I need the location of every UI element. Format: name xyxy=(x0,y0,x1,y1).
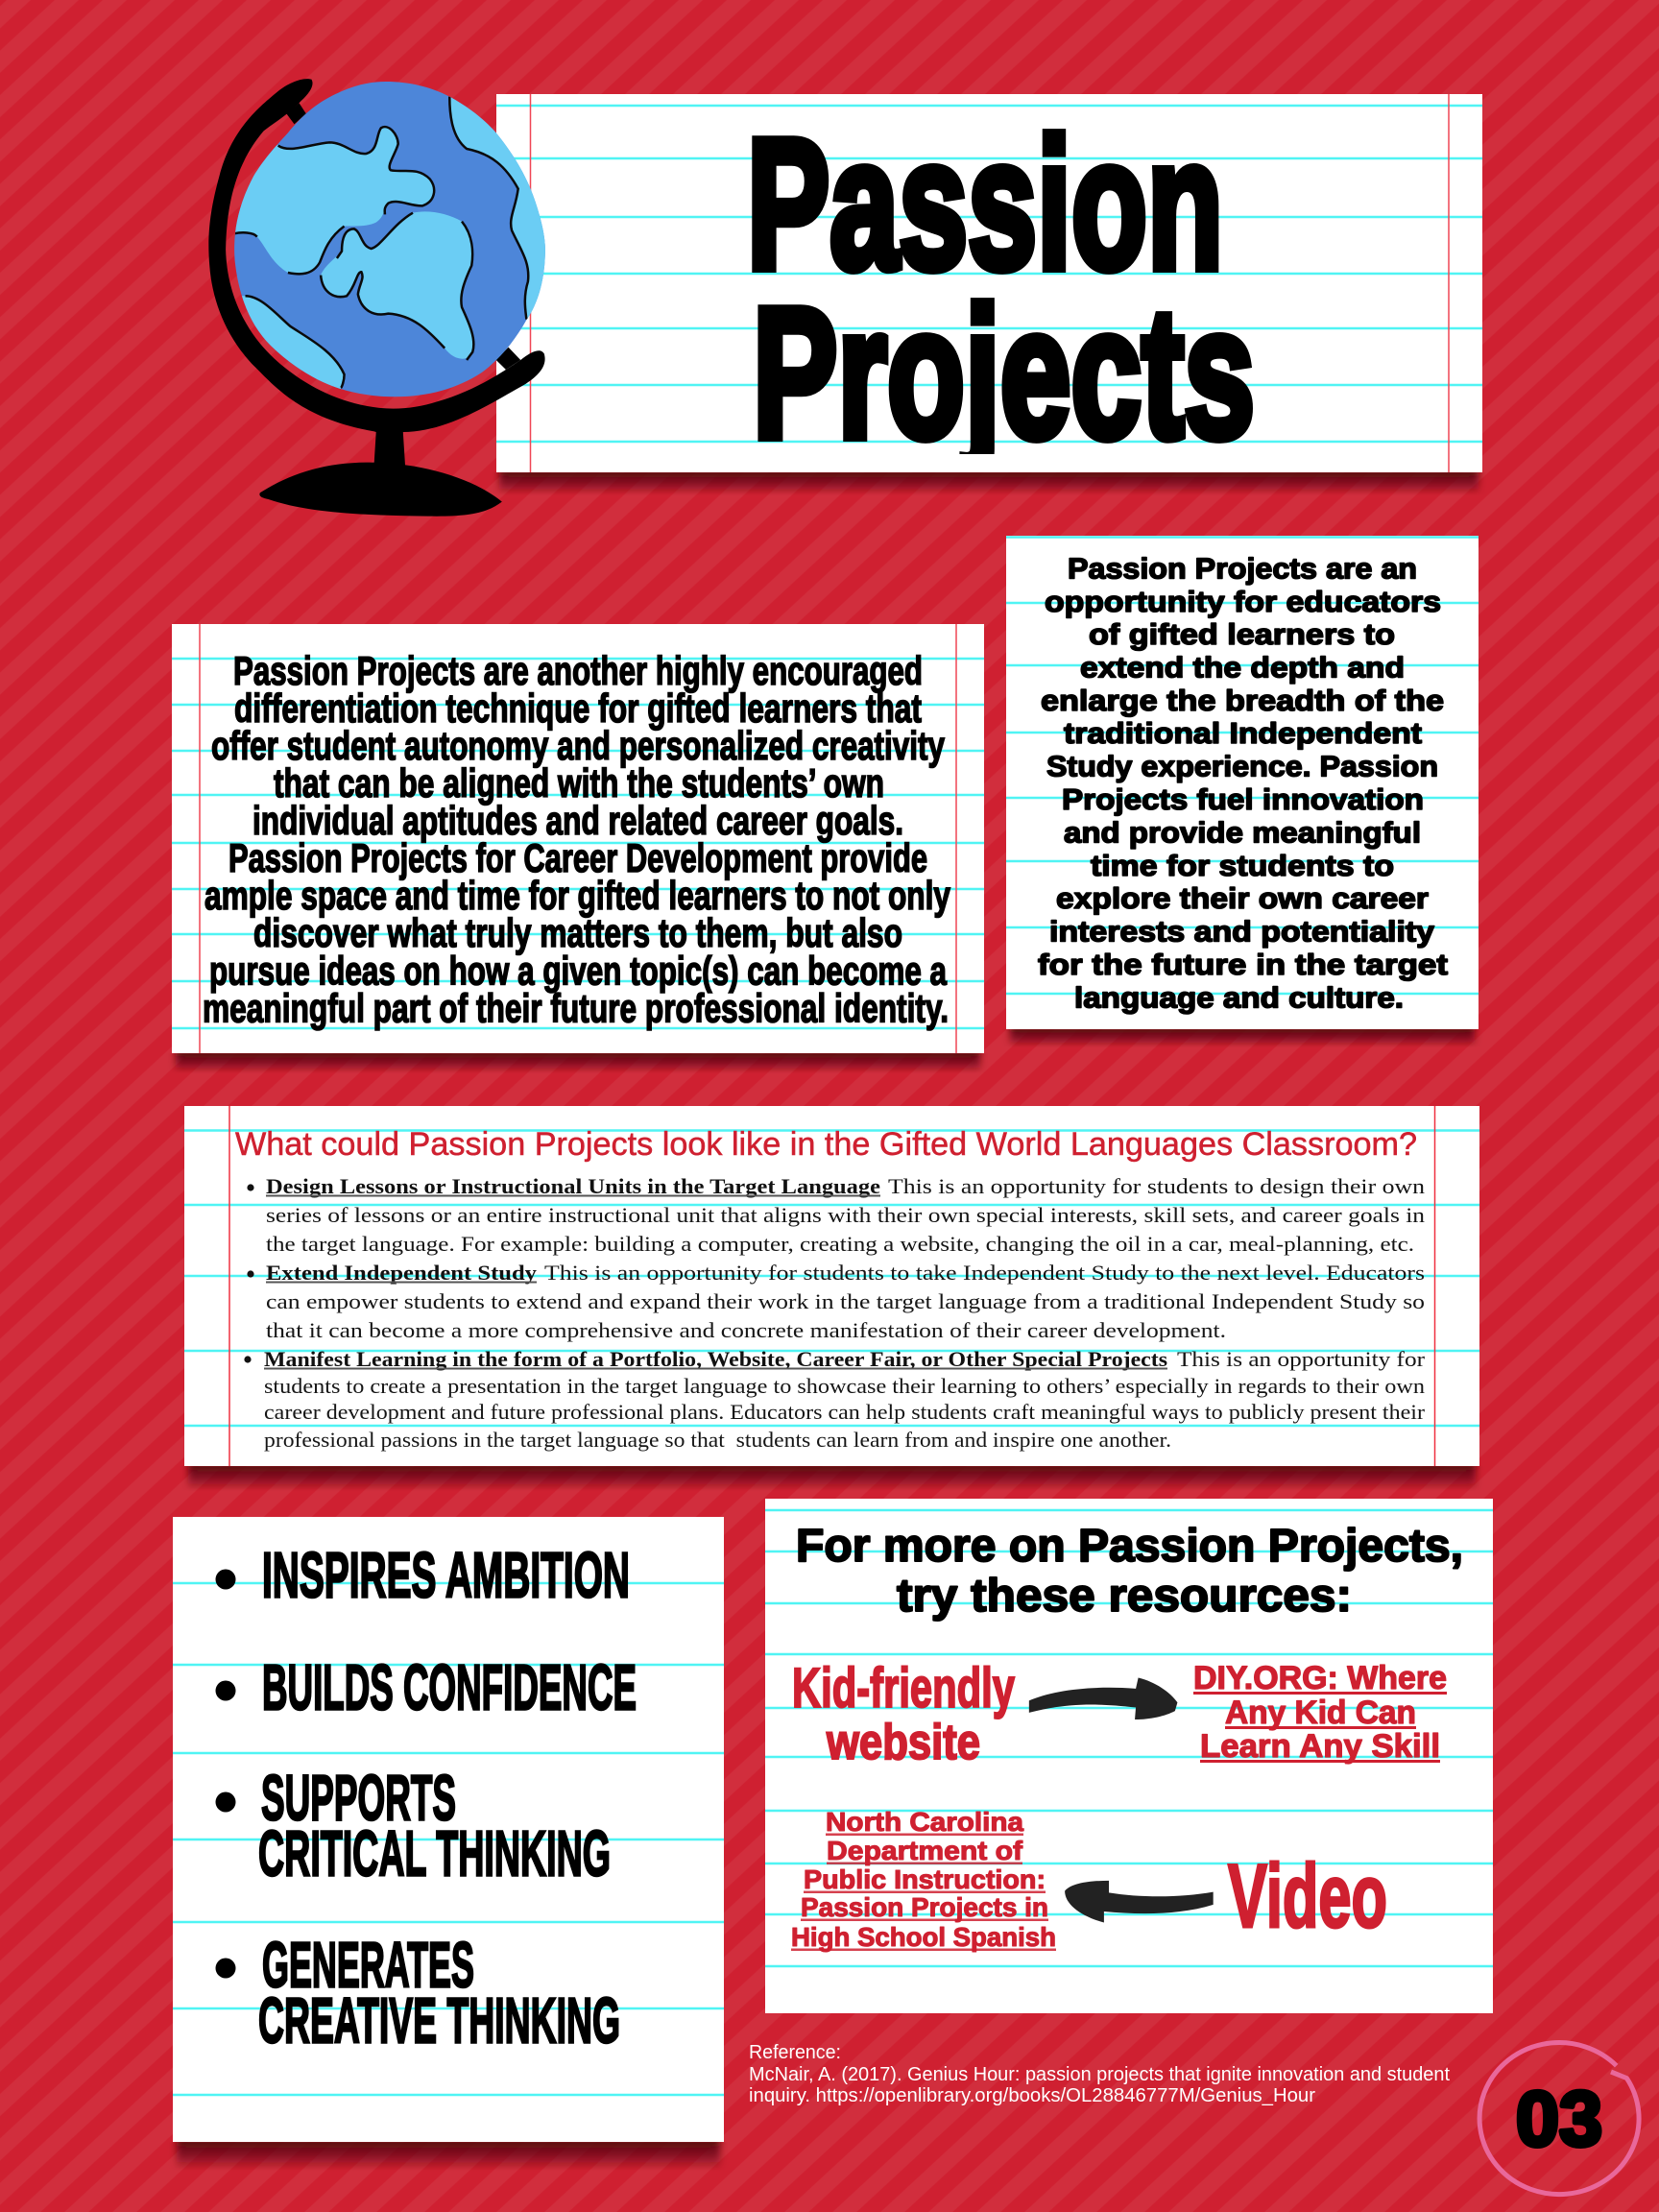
text block: opportunity for educators: enlarge the breadth of the xyxy=(1041,684,1444,717)
panel: benefits list xyxy=(173,1517,724,2142)
list item: extend independent study: This is an opportunity for students to take Independent Study to the next level. Educators xyxy=(544,1261,1425,1285)
text block: reference: Reference: xyxy=(749,2042,841,2063)
text block: opportunity for educators: for the future in the target xyxy=(1038,948,1448,981)
arrow: left to NC DPI xyxy=(1065,1881,1214,1922)
text block: opportunity for educators: opportunity for educators xyxy=(1045,585,1441,618)
list item: extend independent study xyxy=(247,1261,1425,1342)
list item: manifest learning: career development and future professional plans. Educators can help students craft meaningful ways to publicly present their xyxy=(264,1400,1426,1424)
panel: differentiation text xyxy=(172,624,984,1053)
text block: reference: McNair, A. (2017). Genius Hour: passion projects that ignite innovation and student xyxy=(749,2064,1450,2085)
list item: manifest learning: students to create a presentation in the target language to showcase their learning to others’ especially in regards to their own xyxy=(264,1374,1425,1398)
text block: opportunity for educators: of gifted learners to xyxy=(1089,617,1395,651)
text block: opportunity for educators: language and culture. xyxy=(1074,981,1404,1014)
list item: extend independent study: can empower students to extend and expand their work in the target language from a traditional Independent Study so xyxy=(266,1289,1425,1313)
list item: generates creative thinking: GENERATES xyxy=(262,1930,474,2001)
text block: opportunity for educators xyxy=(1038,551,1448,1014)
text block: opportunity for educators: Projects fuel innovation xyxy=(1062,782,1424,816)
list item: extend independent study: Extend Independent Study xyxy=(266,1261,537,1285)
heading: more resources: try these resources: xyxy=(897,1571,1352,1622)
link: NC DPI video: Passion Projects in xyxy=(801,1892,1048,1922)
text block: passion projects definition: meaningful part of their future professional identity. xyxy=(203,985,949,1031)
panel: educators text xyxy=(1006,536,1479,1029)
label: kid-friendly website xyxy=(792,1657,1015,1770)
link: NC DPI video xyxy=(791,1807,1056,1952)
list item: design lessons xyxy=(247,1174,1425,1256)
text block: opportunity for educators: Study experience. Passion xyxy=(1046,749,1438,783)
link: DIY.org: DIY.ORG: Where xyxy=(1193,1660,1447,1696)
link: DIY.org xyxy=(1193,1660,1447,1765)
label: video: Video xyxy=(1228,1845,1387,1946)
title: Projects xyxy=(753,269,1255,476)
list item: manifest learning: Manifest Learning in the form of a Portfolio, Website, Career Fair, or Other Special Projects xyxy=(264,1347,1167,1371)
text block: opportunity for educators: interests and potentiality xyxy=(1049,914,1435,949)
text block: passion projects definition: offer student autonomy and personalized creativity xyxy=(211,723,945,768)
link: NC DPI video: High School Spanish xyxy=(791,1922,1056,1952)
icon: globe stand xyxy=(208,79,545,517)
list item: design lessons: series of lessons or an entire instructional unit that aligns with their own special interests, skill sets, and career goals in xyxy=(266,1203,1425,1227)
text block: opportunity for educators: time for students to xyxy=(1091,849,1394,882)
list item: generates creative thinking: CREATIVE THINKING xyxy=(258,1985,620,2056)
text block: opportunity for educators: traditional Independent xyxy=(1064,716,1422,750)
title xyxy=(752,129,1253,454)
text block: passion projects definition: that can be aligned with the students’ own xyxy=(274,760,884,805)
list item: inspires ambition: INSPIRES AMBITION xyxy=(262,1540,630,1611)
text block: reference: inquiry. https://openlibrary.org/books/OL28846777M/Genius_Hour xyxy=(749,2085,1315,2106)
list item: generates creative thinking xyxy=(215,1930,620,2056)
text block: passion projects definition: ample space and time for gifted learners to not only xyxy=(204,873,950,918)
text block: reference xyxy=(749,2042,1450,2106)
list item: inspires ambition xyxy=(215,1540,630,1611)
link: DIY.org: Learn Any Skill xyxy=(1200,1728,1440,1765)
text block: passion projects definition: individual aptitudes and related career goals. xyxy=(252,798,903,843)
text block: passion projects definition: Passion Projects are another highly encouraged xyxy=(233,648,923,693)
text block: opportunity for educators: extend the depth and xyxy=(1080,651,1405,684)
list item: builds confidence xyxy=(215,1651,637,1724)
heading: more resources: For more on Passion Projects, xyxy=(796,1521,1463,1572)
list item: supports critical thinking xyxy=(215,1763,611,1889)
page number badge: 03 xyxy=(1516,2076,1602,2162)
page number badge xyxy=(1479,2043,1639,2195)
text block: passion projects definition: Passion Projects for Career Development provide xyxy=(228,835,927,880)
list item: design lessons: the target language. For example: building a computer, creating a website, changing the oil in a car, meal-planning, etc. xyxy=(266,1232,1414,1256)
text block: opportunity for educators: Passion Projects are an xyxy=(1068,551,1417,586)
heading: classroom question: What could Passion Projects look like in the Gifted World Languages Classroom? xyxy=(235,1126,1417,1163)
label: kid-friendly website: website xyxy=(826,1715,980,1770)
list item: manifest learning: This is an opportunity for xyxy=(1177,1347,1426,1371)
text block: passion projects definition: differentiation technique for gifted learners that xyxy=(234,685,922,731)
icon: globe on stand xyxy=(203,67,565,517)
link: NC DPI video: Department of xyxy=(827,1836,1023,1865)
label: kid-friendly website: Kid-friendly xyxy=(792,1657,1015,1719)
panel: title paper xyxy=(496,94,1482,476)
panel: classroom examples xyxy=(184,1106,1479,1466)
list item: manifest learning: professional passions in the target language so that students can learn from and inspire one another. xyxy=(264,1428,1171,1452)
list item: extend independent study: that it can become a more comprehensive and concrete manifestation of their career development. xyxy=(266,1318,1226,1342)
text block: opportunity for educators: and provide meaningful xyxy=(1064,816,1421,849)
link: DIY.org: Any Kid Can xyxy=(1225,1695,1416,1731)
list item: manifest learning xyxy=(244,1347,1426,1452)
list item: design lessons: Design Lessons or Instructional Units in the Target Language xyxy=(266,1174,880,1198)
text block: passion projects definition: discover what truly matters to them, but also xyxy=(253,910,902,955)
link: NC DPI video: Public Instruction: xyxy=(804,1864,1046,1894)
arrow: right to DIY.org xyxy=(1029,1677,1177,1719)
list item: supports critical thinking: CRITICAL THINKING xyxy=(258,1818,611,1889)
text block: passion projects definition: pursue ideas on how a given topic(s) can become a xyxy=(209,949,947,993)
title: Passion xyxy=(747,100,1223,307)
list item: supports critical thinking: SUPPORTS xyxy=(261,1763,456,1834)
link: NC DPI video: North Carolina xyxy=(826,1807,1023,1837)
list item: design lessons: This is an opportunity for students to design their own xyxy=(888,1174,1425,1198)
text block: passion projects definition xyxy=(203,648,950,1031)
list item: builds confidence: BUILDS CONFIDENCE xyxy=(262,1651,637,1724)
heading: more resources xyxy=(796,1521,1463,1622)
panel: resources xyxy=(765,1499,1493,2013)
text block: opportunity for educators: explore their own career xyxy=(1056,881,1429,915)
